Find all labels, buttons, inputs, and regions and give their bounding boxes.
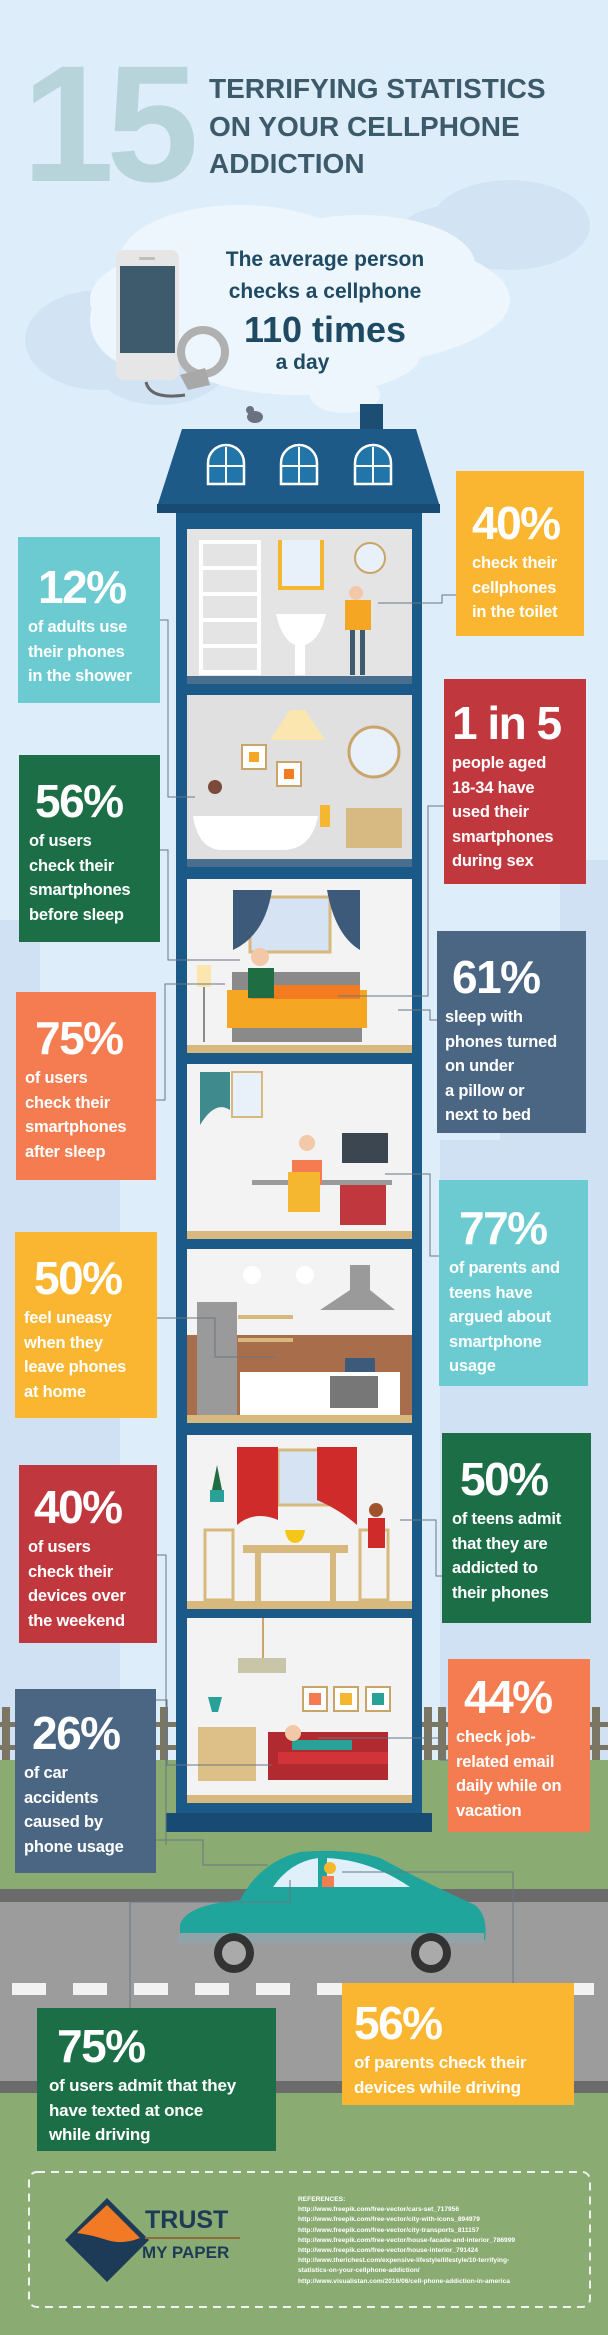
stat: 61% pillow: next to bed bbox=[445, 1106, 531, 1124]
cloud text bbox=[226, 248, 424, 374]
cloud text: a day bbox=[276, 351, 329, 374]
references text bbox=[298, 2196, 515, 2285]
stat: 75% after sleep: of users bbox=[25, 1069, 88, 1087]
stat: 75% after sleep: smartphones bbox=[25, 1118, 126, 1136]
stat: 75% texted driving bbox=[37, 2008, 276, 2151]
stat: 75% texted driving: of users admit that they bbox=[49, 2076, 236, 2095]
stat: 77% argued: of parents and bbox=[449, 1259, 560, 1277]
stat: 40% toilet: check their bbox=[472, 554, 557, 572]
stat: 56% before sleep bbox=[19, 755, 160, 942]
stat: 12% shower: in the shower bbox=[28, 667, 132, 685]
stat: 44% vacation: 44% bbox=[464, 1671, 552, 1723]
stat: 26% car accidents: 26% bbox=[32, 1707, 120, 1759]
skyline bbox=[0, 860, 608, 1780]
stat: 1 in 5: people aged bbox=[452, 754, 546, 772]
stat: 26% car accidents bbox=[15, 1689, 156, 1873]
stat: 26% car accidents: accidents bbox=[24, 1788, 98, 1806]
logo: Trust My Paper: TRUST bbox=[145, 2206, 228, 2234]
cloud text: 110 times bbox=[244, 309, 406, 350]
references text: http://www.therichest.com/expensive-lifestyle/lifestyle/10-terrifying- bbox=[298, 2257, 509, 2264]
stat: 40% weekend: 40% bbox=[34, 1481, 122, 1533]
stat: 12% shower: their phones bbox=[28, 642, 125, 660]
stat: 56% parents driving: devices while driving bbox=[354, 2078, 521, 2096]
stat: 77% argued: argued about bbox=[449, 1308, 551, 1326]
cloud text: checks a cellphone bbox=[229, 280, 421, 303]
stat: 75% after sleep: check their bbox=[25, 1094, 110, 1112]
references text: http://www.freepik.com/free-vector/house-facade-and-interior_786999 bbox=[298, 2237, 515, 2244]
stat: 77% argued: smartphone bbox=[449, 1332, 541, 1350]
stat: 1 in 5: used their bbox=[452, 803, 529, 821]
rooms bbox=[187, 529, 412, 1803]
stat: 50% teens addicted: their phones bbox=[452, 1584, 549, 1602]
stat: 50% teens addicted: of teens admit bbox=[452, 1510, 561, 1528]
stat: 1 in 5: during sex bbox=[452, 852, 533, 870]
stat: 12% shower: of adults use bbox=[28, 618, 127, 636]
stat: 44% vacation: vacation bbox=[456, 1802, 521, 1820]
stat: 75% texted driving: while driving bbox=[49, 2125, 150, 2144]
room4 office bbox=[200, 1072, 392, 1225]
references text: http://www.freepik.com/free-vector/cars-set_717956 bbox=[298, 2206, 459, 2213]
stat: 56% before sleep: 56% bbox=[35, 775, 123, 827]
stat: 26% car accidents: of car bbox=[24, 1764, 68, 1782]
stat: 50% teens addicted bbox=[442, 1433, 591, 1623]
stat: 61% pillow bbox=[437, 931, 586, 1133]
room5 kitchen bbox=[187, 1265, 412, 1415]
stat: 61% pillow: on under bbox=[445, 1057, 514, 1075]
stat: 61% pillow: a pillow or bbox=[445, 1082, 524, 1100]
stat: 26% car accidents: caused by bbox=[24, 1813, 103, 1831]
stat: 77% argued: usage bbox=[449, 1357, 496, 1375]
title text: ON YOUR CELLPHONE bbox=[209, 110, 520, 142]
stat: 61% pillow: phones turned bbox=[445, 1032, 557, 1050]
stat: 75% texted driving: 75% bbox=[57, 2020, 145, 2072]
stat: 1 in 5: 1 in 5 bbox=[452, 697, 561, 749]
references text: http://www.freepik.com/free-vector/city-with-icons_894979 bbox=[298, 2216, 480, 2223]
stat: 12% shower bbox=[18, 537, 160, 703]
stat: 40% toilet: cellphones bbox=[472, 578, 556, 596]
background clouds bbox=[25, 180, 590, 405]
references text: REFERENCES: bbox=[298, 2196, 345, 2203]
stat: 77% argued: 77% bbox=[459, 1202, 547, 1254]
references text: statistics-on-your-cellphone-addiction/ bbox=[298, 2267, 420, 2274]
stat: 50% teens addicted: 50% bbox=[460, 1453, 548, 1505]
stat: 40% weekend: devices over bbox=[28, 1587, 126, 1605]
ground, fence, road bbox=[0, 1760, 608, 2335]
references text: http://www.freepik.com/free-vector/city-transports_811157 bbox=[298, 2227, 479, 2234]
stat: 75% after sleep: 75% bbox=[35, 1012, 123, 1064]
building walls bbox=[176, 513, 422, 1813]
logo: Trust My Paper: MY PAPER bbox=[142, 2243, 229, 2262]
room6 dining bbox=[205, 1447, 388, 1601]
stat: 26% car accidents: phone usage bbox=[24, 1838, 124, 1856]
stat: 40% toilet: in the toilet bbox=[472, 603, 557, 621]
stat: 12% shower: 12% bbox=[38, 561, 126, 613]
references box bbox=[29, 2172, 590, 2307]
stat: 56% before sleep: smartphones bbox=[29, 881, 130, 899]
car bbox=[178, 1851, 486, 1973]
phone + handcuff bbox=[116, 250, 225, 396]
room7 living bbox=[198, 1618, 390, 1781]
logo: Trust My Paper bbox=[65, 2198, 240, 2282]
title text: TERRIFYING STATISTICS bbox=[209, 73, 546, 104]
stat: 44% vacation: daily while on bbox=[456, 1777, 561, 1795]
stat: 50% uneasy: 50% bbox=[34, 1252, 122, 1304]
stat: 56% before sleep: before sleep bbox=[29, 906, 124, 924]
stat: 1 in 5 bbox=[444, 679, 586, 884]
cloud text: The average person bbox=[226, 248, 424, 271]
stat: 1 in 5: 18-34 have bbox=[452, 778, 534, 796]
stat: 40% weekend bbox=[19, 1465, 157, 1643]
stat: 61% pillow: sleep with bbox=[445, 1008, 523, 1026]
stat: 50% teens addicted: that they are bbox=[452, 1534, 548, 1552]
stat: 50% uneasy: at home bbox=[24, 1382, 86, 1400]
stat: 50% uneasy: feel uneasy bbox=[24, 1309, 112, 1327]
stat: 44% vacation: check job- bbox=[456, 1728, 536, 1746]
stat: 40% weekend: the weekend bbox=[28, 1612, 125, 1630]
stat: 50% uneasy: when they bbox=[24, 1334, 103, 1352]
stat: 77% argued: teens have bbox=[449, 1284, 532, 1302]
stat: 56% before sleep: check their bbox=[29, 856, 114, 874]
stat: 75% texted driving: have texted at once bbox=[49, 2100, 203, 2120]
stat: 50% teens addicted: addicted to bbox=[452, 1559, 538, 1577]
stat: 56% before sleep: of users bbox=[29, 832, 92, 850]
title text: ADDICTION bbox=[209, 148, 365, 179]
stat: 50% uneasy: leave phones bbox=[24, 1358, 126, 1376]
connector lines bbox=[130, 595, 513, 2008]
stat: 40% toilet: 40% bbox=[472, 497, 560, 549]
title number 15: 15 bbox=[22, 32, 191, 217]
stat: 56% parents driving: of parents check their bbox=[354, 2053, 526, 2072]
roof bbox=[157, 404, 440, 513]
stat: 75% after sleep: after sleep bbox=[25, 1142, 105, 1160]
room3 bedroom bbox=[197, 890, 367, 1042]
stat: 56% parents driving bbox=[342, 1983, 574, 2105]
title text bbox=[209, 73, 546, 179]
stat: 77% argued bbox=[439, 1180, 588, 1386]
references text: http://www.freepik.com/free-vector/house-interior_791424 bbox=[298, 2247, 478, 2254]
room2 bath bbox=[193, 710, 402, 850]
stat: 61% pillow: 61% bbox=[452, 951, 540, 1003]
stat: 75% after sleep bbox=[16, 992, 156, 1180]
stat: 1 in 5: smartphones bbox=[452, 828, 553, 846]
stat: 44% vacation bbox=[448, 1659, 590, 1832]
stat: 40% weekend: of users bbox=[28, 1538, 91, 1556]
references text: http://www.visualistan.com/2016/06/cell-phone-addiction-in-america bbox=[298, 2278, 510, 2285]
stat: 40% toilet bbox=[456, 471, 584, 636]
stat: 40% weekend: check their bbox=[28, 1562, 113, 1580]
stat: 44% vacation: related email bbox=[456, 1752, 554, 1770]
stat: 50% uneasy bbox=[15, 1232, 157, 1418]
main cloud bbox=[90, 205, 510, 413]
room1 bathroom bbox=[199, 540, 385, 675]
stat: 56% parents driving: 56% bbox=[354, 1997, 442, 2049]
